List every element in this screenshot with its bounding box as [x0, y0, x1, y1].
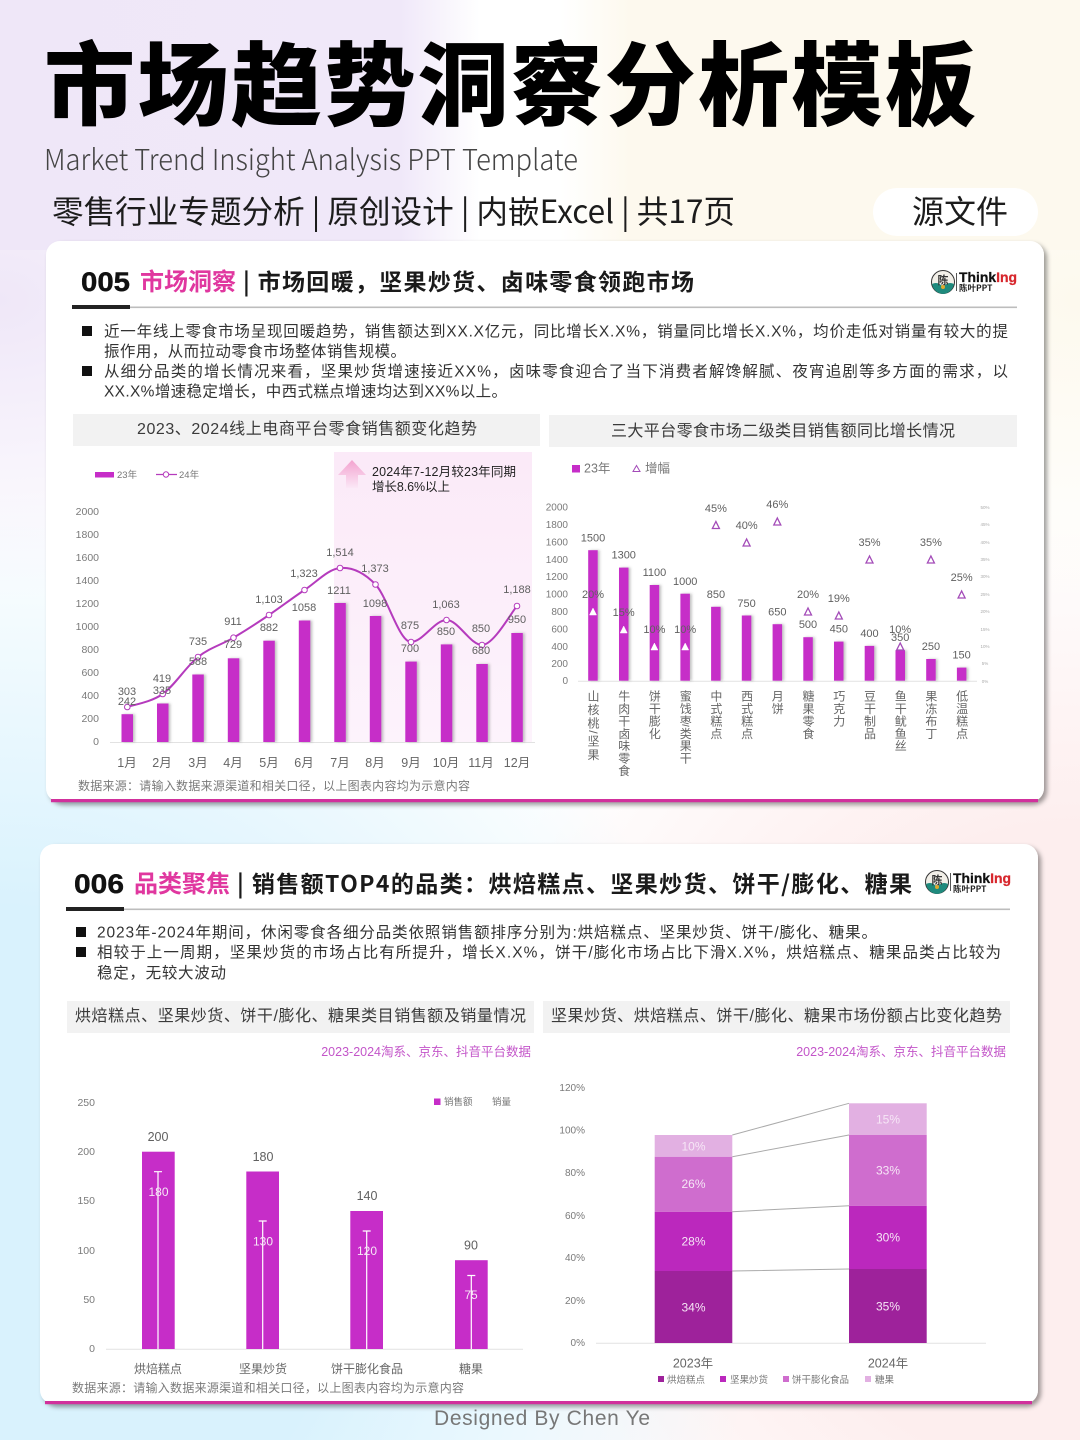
value labels: 450 — [830, 624, 848, 636]
icon: Thinking logo: ThinkIng — [959, 269, 1017, 285]
growth labels — [582, 499, 973, 636]
source tag right: 2023-2024淘系、京东、抖音平台数据 — [796, 1044, 1006, 1059]
y axis: 1400 — [76, 575, 99, 587]
category labels: 蜜饯枣类果干 — [678, 689, 692, 764]
chart: monthly sales 23 vs 24 — [76, 469, 535, 770]
heading: 品类聚焦 — [134, 864, 230, 899]
heading: right chart — [543, 1001, 1010, 1033]
data labels: 2024: 735 — [189, 636, 207, 648]
x axis: 7月 — [330, 756, 350, 770]
value labels: 90 — [464, 1238, 478, 1252]
data labels: 2023: 700 — [401, 643, 419, 655]
y axis right: 0% — [982, 679, 988, 684]
callout: second half growth — [334, 452, 532, 742]
y axis left: 1200 — [546, 572, 568, 583]
y axis: 120% — [559, 1083, 585, 1094]
growth labels: 20% — [582, 589, 604, 601]
heading: 005 — [81, 267, 130, 297]
y axis: 50 — [83, 1294, 95, 1306]
category labels: 果冻布丁 — [924, 690, 938, 740]
value labels: 150 — [952, 650, 971, 662]
value labels: 180 — [253, 1150, 273, 1164]
value labels — [148, 1130, 478, 1302]
heading: left chart: 2023、2024线上电商平台零食销售额变化趋势 — [137, 420, 477, 438]
value labels: 850 — [707, 589, 725, 601]
icon: Thinking logo: 陈 — [932, 872, 942, 888]
text block: insights: 相较于上一周期，坚果炒货的市场占比有所提升，增长X.X%，饼干/膨化市场占比下滑X.X%，烘焙糕点、糖果品类占比较为 — [97, 944, 1001, 962]
value labels: 200 — [148, 1130, 168, 1144]
x axis: 2月 — [152, 756, 172, 770]
y axis left: 2000 — [546, 502, 568, 514]
data labels: 2024: 1,188 — [503, 584, 531, 596]
value labels: 250 — [922, 641, 940, 653]
y axis left: 0 — [562, 676, 568, 687]
value labels: 1000 — [673, 576, 697, 588]
value labels: 140 — [357, 1189, 377, 1203]
data labels: 2023: 850 — [437, 626, 455, 638]
card background — [40, 844, 1038, 1404]
y axis left: 1800 — [546, 520, 568, 531]
connector lines — [732, 1103, 849, 1271]
text block: insights: 近一年线上零食市场呈现回暖趋势，销售额达到XX.X亿元，同比增长X.X%，销量同比增长X.X%，均价走低对销量有较大的提 — [104, 322, 1008, 340]
x axis: 烘焙糕点 — [134, 1361, 182, 1376]
stack: 2023: 26% — [681, 1177, 706, 1191]
x axis: 10月 — [433, 756, 459, 770]
growth labels: 15% — [613, 607, 635, 619]
stack: 2024: 33% — [876, 1164, 900, 1178]
x axis — [134, 1361, 483, 1376]
y axis: 250 — [77, 1097, 95, 1109]
y axis: 400 — [81, 690, 99, 702]
x axis — [117, 756, 530, 770]
category labels: 低温糕点 — [955, 690, 969, 740]
data labels: 2024: 1,063 — [432, 599, 460, 611]
x axis: 9月 — [401, 756, 421, 770]
category labels: 月饼 — [770, 690, 784, 715]
x axis: 2023年 — [673, 1356, 713, 1370]
data labels: 2023: 680 — [472, 645, 490, 657]
heading: | 市场回暖，坚果炒货、卤味零食领跑市场 — [243, 263, 694, 297]
category labels: 糖果零食 — [801, 689, 815, 740]
stack: 2024: 30% — [876, 1230, 900, 1244]
category labels: 鱼干鱿鱼丝 — [893, 690, 907, 752]
callout: second half growth: 2024年7-12月较23年同期 — [372, 464, 516, 479]
subtitle: Market Trend Insight Analysis PPT Template — [44, 137, 578, 179]
y axis right: 35% — [980, 557, 990, 562]
value labels: 1100 — [643, 567, 666, 579]
category labels — [586, 689, 969, 777]
y axis: 150 — [77, 1195, 95, 1207]
callout: second half growth: 增长8.6%以上 — [372, 479, 450, 494]
value labels: 120 — [357, 1244, 377, 1258]
y axis: 60% — [565, 1211, 585, 1222]
heading: left chart — [73, 414, 540, 446]
data source note: 数据来源：请输入数据来源渠道和相关口径，以上图表内容均为示意内容 — [78, 778, 470, 793]
text block: insights: 从细分品类的增长情况来看，坚果炒货增速接近XX%，卤味零食迎合了当下消费者解馋解腻、夜宵追剧等多方面的需求，以 — [104, 362, 1008, 380]
y axis: 1600 — [76, 552, 99, 564]
data labels: 2024: 850 — [472, 623, 490, 635]
category labels: 豆干制品 — [862, 690, 876, 740]
icon: Thinking logo: ThinkIng — [953, 870, 1011, 886]
y axis: 800 — [81, 644, 99, 656]
growth labels: 45% — [705, 503, 727, 515]
heading: 市场洞察 — [140, 262, 236, 297]
chart: sales and volume — [77, 1096, 523, 1376]
x axis: 8月 — [365, 756, 385, 770]
y axis left: 1000 — [546, 590, 568, 600]
legend — [95, 469, 200, 481]
stack: 2024: 35% — [876, 1300, 900, 1314]
legend — [658, 1374, 894, 1386]
x axis: 5月 — [259, 756, 279, 770]
growth labels: 35% — [858, 537, 881, 549]
icon: Thinking logo — [932, 269, 1017, 294]
value labels: 1500 — [581, 532, 605, 544]
text block: insights — [76, 924, 1001, 982]
tagline: 零售行业专题分析 | 原创设计 | 内嵌Excel | 共17页 — [52, 187, 735, 233]
source tag left: 2023-2024淘系、京东、抖音平台数据 — [321, 1044, 531, 1059]
y axis left: 400 — [551, 642, 568, 653]
x axis: 11月 — [468, 756, 494, 770]
icon: Thinking logo: 陈叶PPT — [953, 883, 987, 895]
data labels: 2023: 588 — [189, 656, 207, 668]
y axis right: 45% — [980, 522, 990, 527]
y axis: 600 — [81, 667, 99, 679]
stack: 2023: 10% — [681, 1140, 706, 1154]
growth labels: 10% — [889, 624, 911, 636]
y axis left: 600 — [551, 624, 568, 636]
data labels: 2023 — [118, 585, 526, 708]
legend: 23年 — [584, 462, 610, 476]
line: 2024 — [124, 565, 520, 710]
x axis: 2024年 — [868, 1356, 908, 1370]
panel: 006 category focus — [40, 844, 1038, 1404]
heading: left chart — [67, 1001, 534, 1033]
legend: 饼干膨化食品 — [792, 1374, 849, 1386]
data labels: 2023: 1058 — [292, 602, 316, 614]
legend: 增幅 — [645, 460, 670, 476]
bars — [588, 550, 966, 681]
icon: up arrow — [338, 460, 366, 488]
data labels: 2024: 419 — [153, 673, 171, 685]
growth labels: 46% — [766, 499, 789, 511]
legend: 烘焙糕点 — [667, 1374, 706, 1386]
heading: left chart: 烘焙糕点、坚果炒货、饼干/膨化、糖果类目销售额及销量情况 — [75, 1007, 526, 1025]
data labels: 2024 — [118, 547, 531, 698]
panel: 005 market insight — [46, 241, 1044, 802]
data labels: 2024: 1,373 — [361, 563, 389, 575]
x axis: 饼干膨化食品 — [331, 1361, 403, 1376]
y axis: 20% — [565, 1296, 585, 1307]
legend: 销量 — [492, 1096, 512, 1108]
legend: 24年 — [179, 469, 200, 481]
value labels: 1300 — [611, 550, 636, 562]
source file badge — [873, 187, 1038, 236]
data labels: 2023: 335 — [153, 685, 171, 697]
heading: right chart — [549, 415, 1017, 447]
category labels: 山核桃/坚果 — [586, 690, 600, 762]
stack: 2024 — [849, 1103, 927, 1343]
y axis right: 50% — [980, 505, 990, 510]
stack: 2023 — [655, 1135, 732, 1343]
growth labels: 35% — [920, 537, 942, 549]
x axis: 4月 — [223, 756, 243, 770]
heading: 006 — [74, 869, 124, 899]
heading — [72, 262, 1017, 309]
y axis left: 800 — [551, 607, 568, 618]
data labels: 2024: 303 — [118, 686, 136, 698]
x axis: 糖果 — [459, 1361, 483, 1376]
y axis: 2000 — [76, 506, 99, 518]
text block: insights: 振作用，从而拉动零食市场整体销售规模。 — [104, 342, 406, 360]
legend — [572, 460, 670, 476]
y axis: 100 — [77, 1245, 95, 1257]
y axis left: 200 — [551, 659, 568, 670]
text block: insights: 稳定，无较大波动 — [97, 964, 226, 982]
y axis right: 15% — [980, 627, 990, 632]
y axis — [559, 1083, 986, 1349]
growth labels: 20% — [797, 589, 819, 601]
value labels — [581, 532, 971, 662]
data labels: 2024: 1,323 — [290, 568, 318, 580]
icon: Thinking logo — [926, 870, 1011, 895]
y axis: 1200 — [76, 598, 99, 610]
y axis right: 20% — [980, 609, 990, 614]
source file badge: 源文件 — [912, 187, 1008, 233]
text block: insights: 2023年-2024年期间，休闲零食各细分品类依照销售额排序分别为:烘焙糕点、坚果炒货、饼干/膨化、糖果。 — [97, 924, 877, 942]
y axis: 100% — [559, 1126, 585, 1136]
data labels: 2023: 1098 — [363, 598, 387, 610]
y axis right: 25% — [980, 592, 990, 597]
card background — [46, 241, 1044, 802]
y axis left: 1600 — [546, 538, 568, 548]
y axis right: 30% — [980, 574, 990, 579]
y axis: 200 — [81, 713, 99, 725]
category labels: 巧克力 — [832, 690, 846, 727]
legend: 23年 — [117, 469, 138, 481]
y axis: 0 — [89, 1343, 95, 1355]
value labels: 750 — [737, 598, 756, 610]
data labels: 2023: 729 — [224, 639, 242, 651]
legend: 销售额 — [444, 1096, 473, 1108]
icon: Thinking logo: 陈叶PPT — [959, 282, 993, 294]
category labels: 西式糕点 — [740, 690, 754, 740]
y axis right: 40% — [980, 540, 990, 545]
stack: 2023: 28% — [681, 1234, 706, 1248]
bars — [142, 1152, 488, 1349]
data labels: 2023: 950 — [508, 614, 526, 626]
legend: 坚果炒货 — [730, 1374, 768, 1386]
y axis: 200 — [77, 1146, 95, 1158]
heading: right chart: 坚果炒货、烘焙糕点、饼干/膨化、糖果市场份额占比变化趋势 — [551, 1007, 1002, 1025]
y axis right: 5% — [982, 661, 988, 666]
data labels: 2024: 911 — [224, 616, 242, 628]
stack: 2023: 34% — [681, 1300, 706, 1314]
x axis: 坚果炒货 — [239, 1361, 287, 1376]
heading: right chart: 三大平台零食市场二级类目销售额同比增长情况 — [611, 422, 955, 440]
data labels: 2024: 1,514 — [326, 547, 354, 559]
growth labels: 10% — [643, 624, 666, 636]
value labels: 350 — [891, 632, 909, 644]
data source note: 数据来源：请输入数据来源渠道和相关口径，以上图表内容均为示意内容 — [72, 1380, 464, 1395]
y axis — [76, 506, 535, 748]
bars: 2023 — [122, 603, 523, 742]
category labels: 牛肉干卤味零食 — [617, 689, 631, 777]
text block: insights — [82, 322, 1008, 400]
legend — [434, 1096, 512, 1108]
growth labels: 25% — [951, 572, 973, 584]
legend: 糖果 — [875, 1374, 894, 1386]
y axis left: 1400 — [546, 555, 568, 566]
text block: insights: XX.X%增速稳定增长，中西式糕点增速均达到XX%以上。 — [104, 382, 507, 400]
y axis: 0% — [571, 1338, 585, 1349]
y axis left — [546, 502, 977, 687]
y axis: 1000 — [76, 621, 99, 633]
value labels: 500 — [799, 619, 817, 631]
growth markers — [590, 518, 965, 650]
chart: category sales and growth — [546, 460, 990, 777]
y axis: 80% — [565, 1168, 585, 1179]
category labels: 中式糕点 — [709, 689, 723, 740]
y axis right: 10% — [980, 644, 990, 649]
value labels: 75 — [464, 1288, 478, 1302]
x axis: 6月 — [294, 756, 314, 770]
icon: Thinking logo: 陈 — [938, 272, 948, 288]
y axis: 1800 — [76, 529, 99, 541]
data labels: 2024: 875 — [401, 620, 419, 632]
y axis: 40% — [565, 1253, 585, 1264]
volume markers — [154, 1172, 475, 1349]
data labels: 2023: 1211 — [327, 585, 351, 597]
category labels: 饼干膨化 — [647, 690, 661, 740]
stack: 2024: 15% — [876, 1112, 900, 1126]
data labels: 2023: 882 — [260, 622, 278, 634]
x axis: 1月 — [117, 756, 137, 770]
x axis — [673, 1356, 908, 1370]
x axis: 12月 — [504, 756, 530, 770]
y axis: 0 — [93, 736, 99, 748]
y axis — [77, 1097, 523, 1355]
value labels: 130 — [253, 1234, 273, 1248]
heading — [66, 864, 1010, 911]
credit: Designed By Chen Ye — [434, 1407, 650, 1430]
value labels: 180 — [148, 1185, 169, 1199]
data labels: 2023: 242 — [118, 696, 136, 708]
growth labels: 10% — [674, 624, 696, 636]
growth labels: 40% — [736, 520, 758, 532]
value labels: 650 — [768, 606, 786, 618]
chart: market share stacked — [559, 1083, 986, 1386]
heading: | 销售额TOP4的品类：烘焙糕点、坚果炒货、饼干/膨化、糖果 — [237, 865, 912, 899]
y axis right — [980, 505, 990, 684]
growth labels: 19% — [828, 593, 850, 605]
x axis: 3月 — [188, 756, 208, 770]
data labels: 2024: 1,103 — [255, 594, 283, 606]
title: 市场趋势洞察分析模板 — [44, 13, 976, 145]
value labels: 400 — [860, 628, 879, 640]
